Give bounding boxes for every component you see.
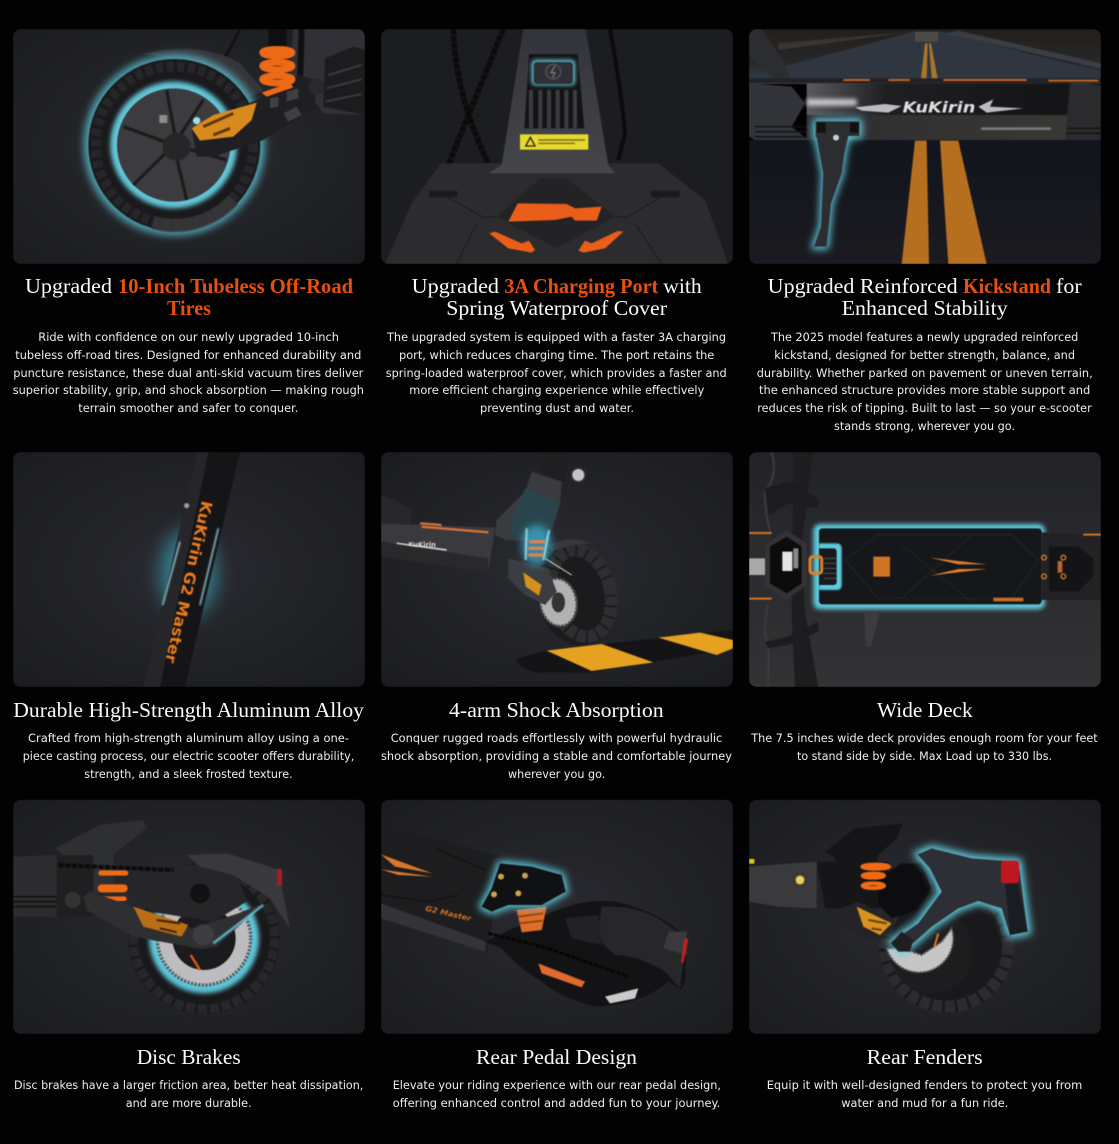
text: charging port description: The upgraded system is equipped with a faster 3A charging [386,330,726,344]
text: kickstand description: reduces the risk of tipping. Built to last — so your e-scooter [757,401,1092,415]
text: wide deck description: The 7.5 inches wide deck provides enough room for your feet [750,731,1098,745]
heading: wide deck: Wide Deck [877,698,973,722]
heading: charging port: Upgraded [412,274,499,298]
text: kickstand description [757,330,1093,433]
heading: kickstand: for [1056,274,1082,298]
text: shock absorption description: shock absorption, providing a stable and comfortable journey [381,749,732,763]
heading: tubeless tires: Tires [167,296,211,320]
text: tubeless tires description: terrain smoother and safer to conquer. [78,401,298,415]
text: tubeless tires description [13,330,364,415]
image: rear fender with glow [749,800,1101,1034]
feature card: wide deck [749,452,1101,763]
text: charging port description: preventing dust and water. [480,401,634,415]
image: rear disc brake [13,800,365,1034]
text: disc brakes description [14,1078,363,1110]
text: kickstand description: durability. Whether parked on pavement or uneven terrain, [757,366,1093,380]
heading: rear fenders: Rear Fenders [867,1045,983,1069]
text: aluminum alloy description [23,731,354,781]
text: rear fenders description: Equip it with well-designed fenders to protect you from [767,1078,1082,1092]
heading: tubeless tires: Upgraded [25,274,112,298]
feature card: kickstand [749,29,1101,433]
image: charging port tower and deck [381,29,733,264]
text: shock absorption description: wherever you go. [508,767,605,781]
heading: disc brakes: Disc Brakes [137,1045,241,1069]
text: disc brakes description: and are more durable. [126,1096,252,1110]
heading: tubeless tires [25,274,353,320]
heading: rear pedal: Rear Pedal Design [476,1045,637,1069]
text: tubeless tires description: puncture resistance, these dual anti-skid vacuum tires deliver [13,366,364,380]
image: front tire with teal glow [13,29,365,264]
text: wide deck description: to stand side by side. Max Load up to 330 lbs. [797,749,1052,763]
text: rear pedal description: offering enhanced control and added fun to your journey. [393,1096,720,1110]
heading: charging port: Spring Waterproof Cover [446,296,667,320]
image: top view of wide deck [749,452,1101,687]
text: charging port description [386,330,727,415]
text: shock absorption description: Conquer rugged roads effortlessly with powerful hydraulic [391,731,722,745]
heading: charging port [412,274,702,320]
heading: kickstand [768,274,1082,320]
text: rear pedal description [393,1078,721,1110]
text: rear fenders description: water and mud for a fun ride. [841,1096,1008,1110]
text: aluminum alloy description: piece casting process, our electric scooter offers durability, [23,749,354,763]
text: kickstand description: the enhanced structure provides more stable support and [759,383,1090,397]
image: front suspension over speed bump: KuKirin [408,541,436,549]
text: kickstand description: stands strong, wherever you go. [834,419,1015,433]
text: tubeless tires description: superior stability, grip, and shock absorption — making rough [13,383,364,397]
feature card: disc brakes [13,800,365,1110]
image: rear pedal from below: G2 Master [425,904,472,923]
heading: kickstand: Upgraded Reinforced [768,274,958,298]
text: charging port description: spring-loaded waterproof cover, which provides a faster and [386,366,727,380]
image: rear pedal from below [381,800,733,1034]
text: shock absorption description [381,731,732,781]
image: front suspension over speed bump [381,452,733,687]
text: aluminum alloy description: Crafted from high-strength aluminum alloy using a one- [28,731,349,745]
feature card: aluminum alloy [13,452,365,781]
feature card: rear pedal [381,800,733,1110]
heading: aluminum alloy: Durable High-Strength Aluminum Alloy [13,698,364,722]
text: kickstand description: The 2025 model features a newly upgraded reinforced [770,330,1078,344]
heading: kickstand: Enhanced Stability [842,296,1008,320]
text: charging port description: more efficient charging experience while effectively [409,383,704,397]
text: charging port description: port, which reduces charging time. The port retains the [399,348,714,362]
heading: tubeless tires: 10-Inch Tubeless Off-Road [118,274,353,298]
heading: charging port: with [663,274,702,298]
image: kickstand over night road: KuKirin [903,99,975,116]
feature card: shock absorption [381,452,733,781]
feature card: charging port [381,29,733,415]
image: scooter stem with glow [13,452,365,687]
heading: charging port: 3A Charging Port [504,274,659,298]
image: scooter stem with glow: KuKirin G2 Master [161,499,216,665]
text: tubeless tires description: tubeless off-road tires. Designed for enhanced durability and [15,348,361,362]
text: kickstand description: kickstand, designed for better strength, balance, and [774,348,1075,362]
image: kickstand over night road [749,29,1101,264]
feature card: tubeless tires [13,29,365,415]
heading: kickstand: Kickstand [963,274,1051,298]
text: rear fenders description [767,1078,1082,1110]
text: tubeless tires description: Ride with confidence on our newly upgraded 10-inch [38,330,339,344]
text: aluminum alloy description: strength, and a sleek frosted texture. [84,767,293,781]
text: wide deck description [750,731,1098,763]
feature card: rear fenders [749,800,1101,1110]
text: disc brakes description: Disc brakes have a larger friction area, better heat dissipation, [14,1078,363,1092]
heading: shock absorption: 4-arm Shock Absorption [449,698,664,722]
text: rear pedal description: Elevate your riding experience with our rear pedal design, [393,1078,721,1092]
